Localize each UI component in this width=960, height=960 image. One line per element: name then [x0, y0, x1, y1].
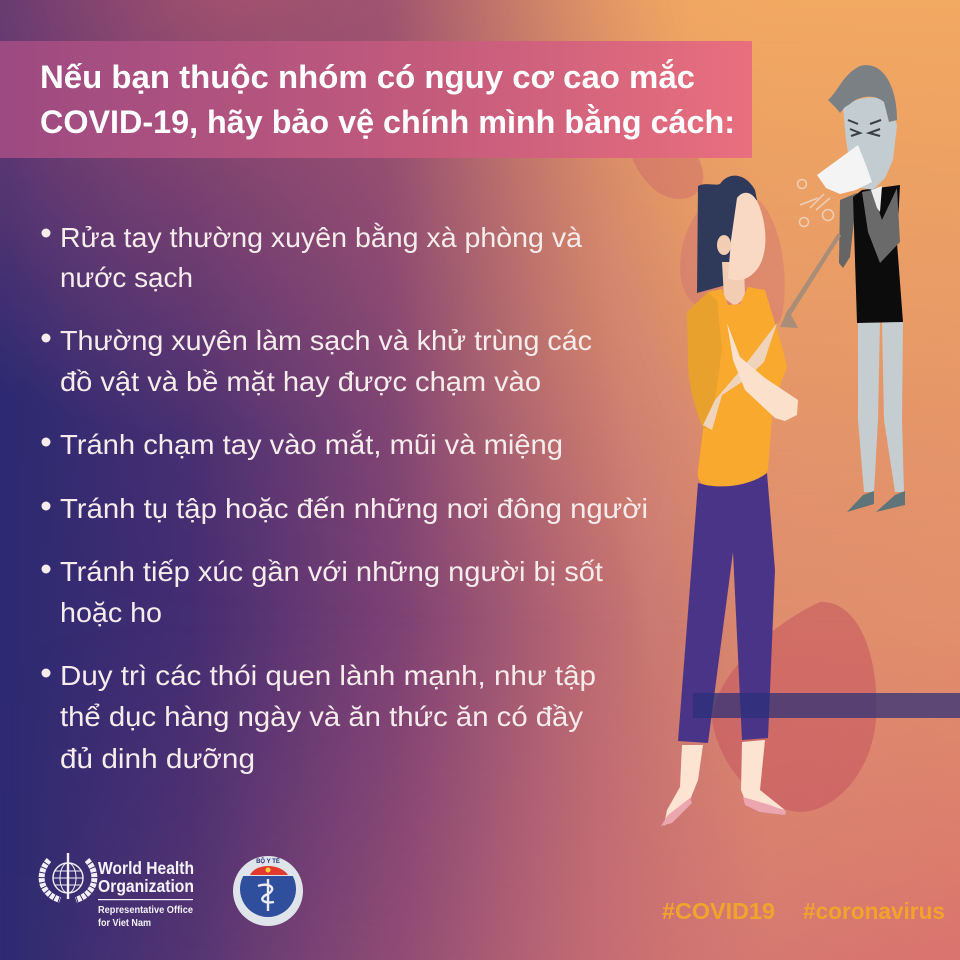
arrow	[780, 233, 841, 328]
bullet 6: Duy trì các thói quen lành mạnh, như tập	[60, 660, 596, 691]
title text	[40, 59, 735, 140]
bullet 1: Rửa tay thường xuyên bằng xà phòng và	[60, 222, 582, 253]
bullet 4: Tránh tụ tập hoặc đến những nơi đông người	[60, 493, 648, 524]
pants	[678, 473, 775, 743]
sneeze particles	[798, 180, 834, 226]
WHO logo	[42, 853, 194, 929]
WHO text: for Viet Nam	[98, 918, 151, 929]
ear	[717, 235, 731, 255]
bullet 6: đủ dinh dưỡng	[60, 743, 255, 774]
man sneezing illustration	[780, 65, 905, 512]
hashtags	[662, 898, 945, 924]
bullet 1	[42, 222, 582, 293]
decorative band	[693, 693, 960, 718]
shirt	[698, 287, 787, 487]
WHO emblem	[42, 853, 94, 900]
hair	[697, 176, 757, 293]
Ministry of Health logo	[233, 856, 303, 926]
bullet 2	[42, 325, 592, 397]
face	[728, 193, 765, 280]
man hair	[828, 65, 897, 122]
woman illustration	[661, 176, 798, 826]
bullet 3: Tránh chạm tay vào mắt, mũi và miệng	[60, 429, 563, 460]
man eyes	[848, 120, 881, 136]
man shirt	[871, 186, 882, 212]
man legs	[858, 320, 904, 492]
forearm back	[703, 323, 777, 430]
WHO text: Organization	[98, 876, 194, 896]
bullet 5: Tránh tiếp xúc gần với những người bị sốt	[60, 556, 603, 587]
hashtags: #COVID19	[662, 898, 775, 924]
WHO text: World Health	[98, 858, 194, 878]
neck	[722, 262, 745, 306]
WHO text: Representative Office	[98, 905, 193, 916]
ministry name: BỘ Y TẾ	[256, 857, 280, 865]
bullet 2: Thường xuyên làm sạch và khử trùng các	[60, 325, 592, 356]
hashtags: #coronavirus	[803, 898, 945, 924]
forearm front	[727, 323, 798, 421]
background blobs	[600, 130, 877, 812]
bullet 2: đồ vật và bề mặt hay được chạm vào	[60, 366, 541, 397]
bullet 5: hoặc ho	[60, 597, 162, 628]
man lapel	[862, 188, 900, 263]
man jacket sleeve	[839, 193, 857, 268]
man vest	[853, 185, 903, 323]
tissue	[817, 145, 872, 194]
WHO text	[98, 858, 194, 929]
bullet 1: nước sạch	[60, 262, 193, 293]
bullet 6	[42, 660, 596, 774]
title banner	[0, 41, 752, 158]
shoes	[661, 797, 786, 826]
bullet 6: thể dục hàng ngày và ăn thức ăn có đầy	[60, 701, 583, 732]
man shoes	[847, 491, 905, 512]
sleeve	[687, 292, 722, 430]
man face	[843, 98, 897, 190]
bullet list	[42, 222, 648, 774]
legs	[664, 740, 785, 826]
bullet 5	[42, 556, 603, 628]
title text: Nếu bạn thuộc nhóm có nguy cơ cao mắc	[40, 59, 695, 95]
title text: COVID-19, hãy bảo vệ chính mình bằng cách:	[40, 104, 735, 140]
